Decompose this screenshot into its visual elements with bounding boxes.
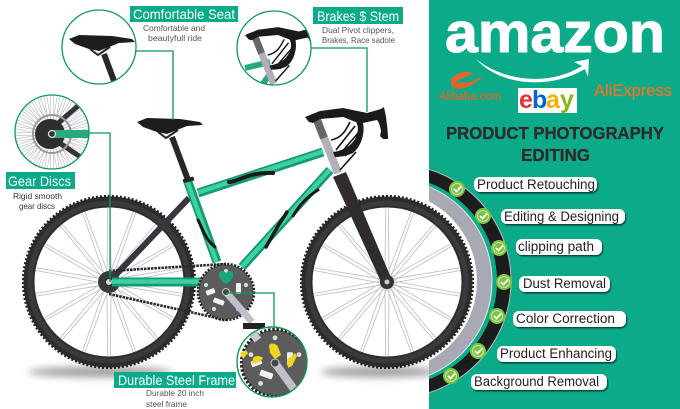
callout line: brakes xyxy=(311,48,367,112)
head tube, handlebars xyxy=(305,107,388,173)
green frame tubes xyxy=(112,152,330,282)
check icons xyxy=(443,181,512,384)
detail circle: gear discs xyxy=(14,94,90,170)
service: clipping path: clipping path xyxy=(518,239,594,254)
heading: EDITING xyxy=(521,145,590,165)
detail circle: chainring xyxy=(237,327,309,397)
caption: brakes line 2: Brakes, Race sadole xyxy=(322,35,395,45)
front wheel xyxy=(301,196,473,368)
detail circle: seat xyxy=(61,9,137,85)
heading xyxy=(446,123,664,165)
caption: gear: Rigid smooth xyxy=(13,191,62,201)
service: Editing & Designing: Editing & Designing xyxy=(504,209,619,224)
label: Brakes $ Stem xyxy=(313,7,403,45)
amazon smile arrow xyxy=(476,59,589,82)
service: Dust Removal: Dust Removal xyxy=(523,276,606,291)
caption: seat: Comfortable and xyxy=(143,23,205,33)
caption: gear line 2: gear discs xyxy=(19,201,55,211)
chainring and crank xyxy=(198,264,265,329)
rear cassette xyxy=(98,271,120,293)
ebay logo: b xyxy=(532,86,547,114)
ebay logo: e xyxy=(519,86,533,114)
hubs xyxy=(380,275,394,289)
panel: services background xyxy=(429,0,680,409)
label: Comfortable Seat: Comfortable Seat xyxy=(133,6,235,22)
label: Brakes $ Stem: Brakes $ Stem xyxy=(317,8,399,24)
services list xyxy=(471,177,626,390)
aliexpress logo: AliExpress xyxy=(594,81,672,100)
callout line: frame xyxy=(226,293,274,328)
rear stays and chain xyxy=(109,198,226,320)
label: Gear Discs xyxy=(6,172,75,211)
label: Durable Steel Frame: Durable Steel Frame xyxy=(118,372,235,388)
front wheel ring decoration xyxy=(429,168,512,394)
ebay logo xyxy=(518,86,577,114)
caption: frame: Durable 20 inch xyxy=(146,388,204,398)
ground shadows xyxy=(28,367,440,377)
caption: seat line 2: beautyfull ride xyxy=(148,33,202,43)
ebay logo: y xyxy=(560,86,574,114)
fork xyxy=(333,172,392,284)
rear wheel xyxy=(23,196,195,368)
ebay logo: a xyxy=(546,86,561,114)
detail circle: brakes xyxy=(237,11,317,85)
callout line: seat xyxy=(136,51,173,120)
service: Product Retouching: Product Retouching xyxy=(477,177,595,192)
caption: frame line 2: steel frame xyxy=(146,399,187,409)
bicycle xyxy=(23,107,473,368)
label: Comfortable Seat xyxy=(130,6,238,43)
label: Durable Steel Frame xyxy=(114,372,236,409)
service: Product Enhancing: Product Enhancing xyxy=(500,346,612,361)
service: Background Removal: Background Removal xyxy=(474,374,599,389)
heading: PRODUCT PHOTOGRAPHY xyxy=(446,123,664,143)
amazon logo: amazon xyxy=(445,1,665,65)
callout line: gear xyxy=(89,133,110,282)
label: Gear Discs: Gear Discs xyxy=(8,173,71,189)
frame black decals xyxy=(198,173,318,247)
caption: brakes: Dual Pivot clippers, xyxy=(322,25,394,35)
alibaba logo: Alibaba.com xyxy=(439,91,501,103)
service: Color Correction: Color Correction xyxy=(516,311,615,326)
seatpost and saddle xyxy=(137,118,203,183)
alibaba logo xyxy=(439,72,501,103)
